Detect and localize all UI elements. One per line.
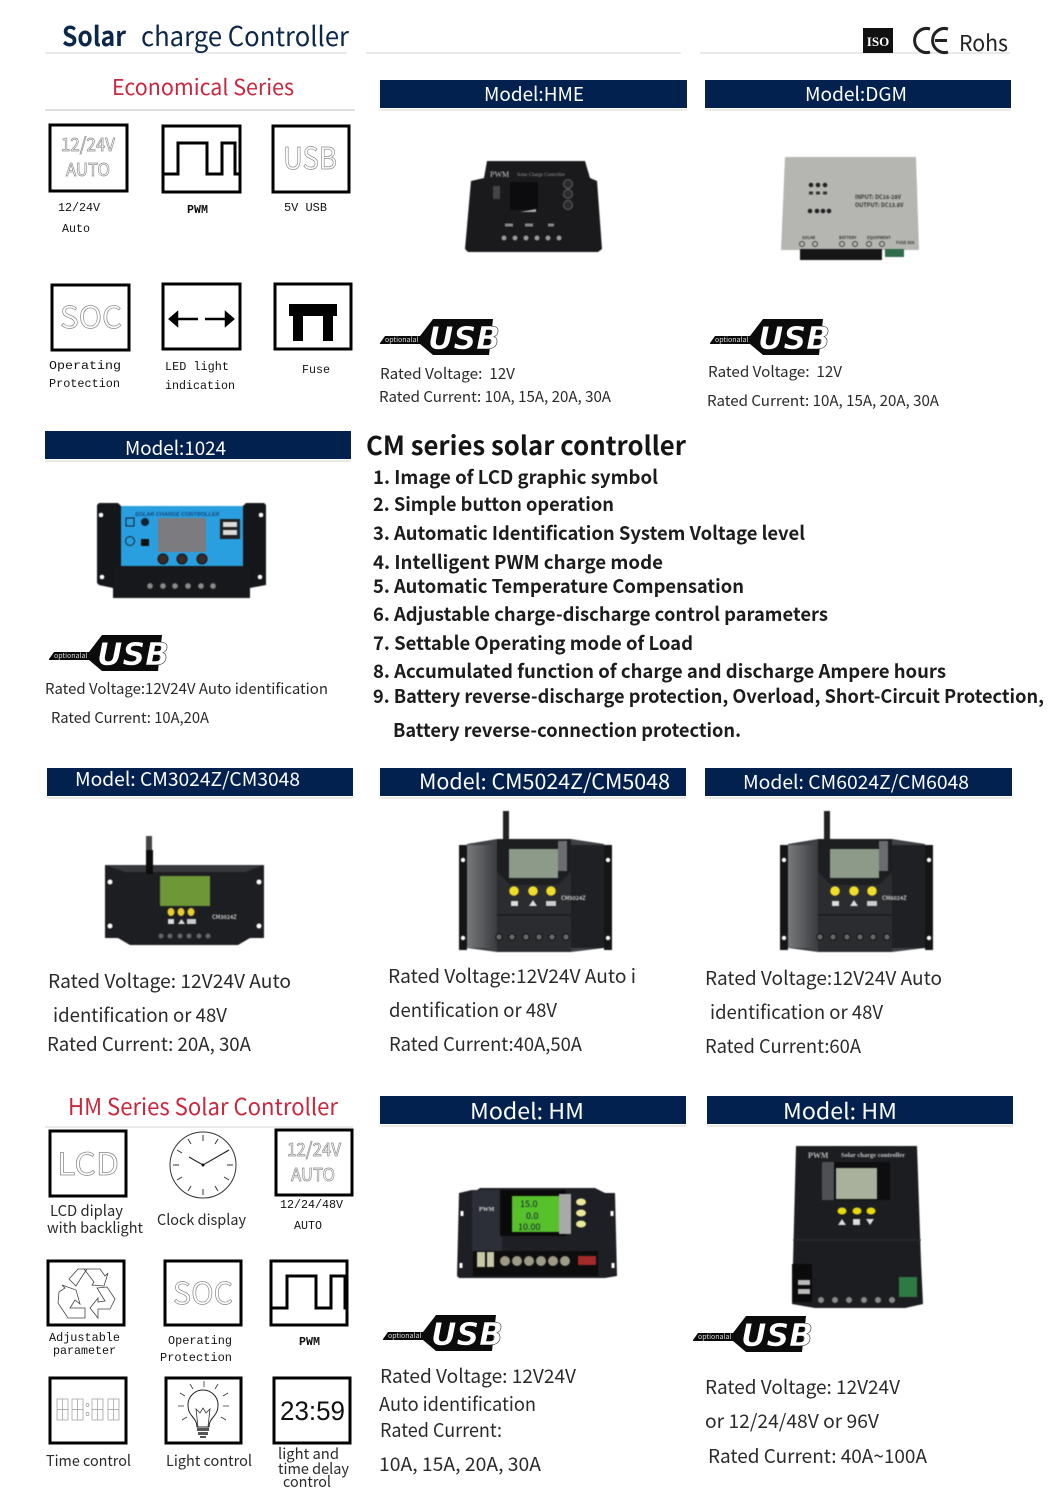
badge: optional USB: TM [807, 348, 817, 358]
header bar: Model DGM [705, 80, 1011, 108]
product photo: HM controller: 15.0 [520, 1197, 538, 1210]
header bar: CM6024Z: Model: CM6024Z/CM6048 [743, 768, 969, 795]
icon: 12/24/48V auto [276, 1130, 352, 1233]
icon: 23:59 time delay: light and [278, 1443, 339, 1464]
certification marks: Rohs [959, 26, 1008, 58]
panel: Model CM3024Z/CM3048 [47, 765, 353, 1057]
icon: SOC: Operating [49, 359, 121, 373]
product photo: DGM controller: EQUIPMENT [867, 235, 891, 241]
badge: optional USB: TM [146, 664, 156, 674]
specs: CM6024Z: Rated Voltage:12V24V Auto [705, 964, 942, 991]
icon: adjustable parameter: Adjustable [49, 1331, 120, 1345]
icon: USB: 5V USB [284, 201, 327, 215]
specs: HME: Rated Current: 10A, 15A, 20A, 30A [379, 386, 612, 407]
panel: CM series feature list [366, 426, 1044, 743]
icon: 23:59 time delay: time delay [278, 1458, 349, 1479]
icon: 12/24V auto [50, 125, 127, 236]
product photo: DGM controller: FUSE 30A [896, 240, 915, 246]
icon: 23:59 time delay [274, 1378, 350, 1492]
specs: HM left: Rated Voltage: 12V24V [380, 1362, 576, 1389]
specs: DGM [707, 361, 940, 411]
product photo: HM large controller [792, 1146, 923, 1308]
feature list: 2. Simple button operation [373, 490, 614, 517]
specs: HM left [379, 1362, 576, 1477]
product photo: HME controller: Solar Charge Controller [517, 173, 565, 178]
header bar: Model 1024: Model:1024 [125, 434, 226, 461]
icon: 12/24V auto: AUTO [66, 156, 110, 182]
badge: optional USB: optionalal [715, 335, 748, 345]
heading: Economical Series: Economical Series [112, 70, 294, 102]
feature list: 4. Intelligent PWM charge mode [373, 548, 663, 575]
icon: time control: Time control [46, 1450, 131, 1471]
icon: PWM [271, 1261, 347, 1349]
specs: CM5024Z: Rated Voltage:12V24V Auto i [388, 962, 636, 989]
specs: 1024 [45, 678, 328, 728]
header bar: Model 1024 [45, 431, 351, 461]
product photo: HM large controller: PWM [808, 1151, 829, 1160]
panel: Model HM (right) [693, 1094, 1013, 1469]
specs: 1024: Rated Current: 10A,20A [51, 707, 210, 728]
icon: PWM: PWM [299, 1335, 320, 1349]
product photo: CM6024Z: CM6024Z [882, 894, 907, 902]
specs: HM right: or 12/24/48V or 96V [705, 1407, 879, 1434]
header bar: CM3024Z [47, 765, 353, 796]
panel: Model 1024 [45, 431, 351, 728]
feature list: 7. Settable Operating mode of Load [373, 629, 693, 656]
product photo: HM controller: PWM [479, 1207, 495, 1213]
specs: HM right: Rated Current: 40A~100A [708, 1442, 927, 1469]
panel: economical series feature icons [49, 125, 351, 393]
specs: HM right: Rated Voltage: 12V24V [705, 1373, 900, 1400]
product photo: DGM controller: BATTERY [839, 235, 857, 241]
specs: CM3024Z [47, 967, 291, 1057]
icon: LCD: with backlight [47, 1217, 143, 1238]
product photo: CM3024Z [105, 836, 264, 945]
icon: adjustable parameter [48, 1261, 124, 1358]
badge: optional USB: TM [477, 348, 487, 358]
icon: SOC: Protection [49, 377, 120, 391]
specs: HM right [705, 1373, 927, 1469]
product photo: DGM controller: SOLAR [802, 235, 815, 241]
header bar: Model HME [380, 80, 687, 108]
icon: SOC: Operating [168, 1334, 232, 1348]
title [62, 15, 349, 54]
header bar: CM5024Z: Model: CM5024Z/CM5048 [419, 766, 670, 796]
product photo: CM5024Z [459, 811, 612, 952]
badge: optional USB: optionalal [385, 335, 418, 345]
badge: optional USB: optionalal [388, 1331, 421, 1341]
product photo: CM6024Z [780, 811, 933, 952]
icon: adjustable parameter: parameter [53, 1344, 116, 1358]
product photo: HM controller: 10.00 [518, 1220, 540, 1233]
icon: LED light indication: LED light [165, 360, 229, 374]
specs: HM left: Auto identification [379, 1390, 536, 1417]
badge: optional USB: USB [428, 321, 500, 357]
icon: PWM [163, 126, 240, 217]
badge: optional USB: USB [97, 637, 169, 673]
specs: CM3024Z: identification or 48V [53, 1001, 227, 1028]
specs: CM3024Z: Rated Voltage: 12V24V Auto [48, 967, 291, 994]
icon: LCD: LCD [57, 1139, 119, 1184]
icon: fuse [275, 284, 351, 377]
panel: Model CM6024Z/CM6048 [705, 768, 1012, 1059]
badge: optional USB: optionalal [698, 1332, 731, 1342]
header bar: Model HM: Model: HM [470, 1094, 584, 1126]
panel: Model HM (left) [379, 1094, 686, 1477]
icon: clock [157, 1132, 246, 1230]
header bar: Model HM: Model: HM [783, 1094, 897, 1126]
icon: 12/24/48V auto: AUTO [294, 1219, 322, 1233]
product photo: HME controller: PWM [490, 170, 509, 179]
specs: 1024: Rated Voltage:12V24V Auto identification [45, 678, 328, 699]
header bar: CM6024Z [705, 768, 1012, 796]
icon: 23:59 time delay: control [283, 1471, 331, 1492]
badge: optional USB [383, 1315, 503, 1354]
icon: SOC: SOC [60, 293, 122, 337]
panel: HM series feature icons [46, 1130, 352, 1492]
badge: optional USB: USB [741, 1318, 813, 1354]
icon: PWM: PWM [187, 203, 208, 217]
icon: 23:59 time delay: 23:59 [280, 1396, 345, 1426]
icon: SOC [160, 1261, 241, 1365]
header bar: CM3024Z: Model: CM3024Z/CM3048 [75, 765, 300, 792]
feature list [373, 463, 1044, 743]
header bar: Model DGM: Model:DGM [805, 80, 907, 107]
specs: DGM: Rated Current: 10A, 15A, 20A, 30A [707, 390, 940, 411]
specs: CM5024Z: dentification or 48V [389, 996, 557, 1023]
icon: fuse: Fuse [302, 363, 330, 377]
product photo: CM3024Z: CM3024Z [212, 913, 237, 921]
specs: CM6024Z: Rated Current:60A [705, 1032, 861, 1059]
product photo: HM large controller: Solar charge controller [841, 1152, 905, 1159]
heading: CM series: CM series solar controller [366, 426, 687, 463]
icon: SOC: Protection [160, 1351, 232, 1365]
icon: light bulb [166, 1378, 252, 1471]
specs: DGM: Rated Voltage: 12V [708, 361, 842, 382]
specs: HM left: 10A, 15A, 20A, 30A [379, 1450, 541, 1477]
badge: optional USB: USB [758, 321, 830, 357]
badge: optional USB: USB [431, 1317, 503, 1353]
icon: 12/24V auto: 12/24V [61, 131, 116, 157]
feature list: 8. Accumulated function of charge and discharge Ampere hours [373, 657, 946, 684]
header bar: Model HME: Model:HME [484, 80, 584, 107]
header bar: Model HM [707, 1094, 1013, 1126]
product photo: DGM controller: INPUT: DC16-28V [855, 193, 902, 201]
specs: HME [379, 363, 612, 407]
icon: SOC: SOC [173, 1269, 233, 1313]
product photo: CM5024Z: CM5024Z [561, 894, 586, 902]
specs: CM5024Z: Rated Current:40A,50A [389, 1030, 582, 1057]
product photo: 1024 controller [97, 503, 266, 598]
certification marks: ISO [867, 34, 889, 49]
badge: optional USB [380, 319, 500, 358]
product photo: DGM controller: OUTPUT: DC13.8V [855, 201, 904, 209]
badge: optional USB: TM [790, 1345, 800, 1355]
icon: SOC [49, 285, 129, 391]
certification marks [863, 26, 1008, 58]
product photo: 1024 controller: SOLAR CHARGE CONTROLLER [135, 512, 219, 518]
icon: time control [46, 1378, 131, 1471]
product photo: DGM controller [781, 157, 919, 260]
feature list: Battery reverse-connection protection. [393, 716, 741, 743]
product photo: HM controller: 0.0 [526, 1209, 538, 1222]
icon: 12/24V auto: Auto [62, 222, 90, 236]
title: charge Controller [141, 15, 349, 54]
icon: USB [273, 126, 349, 215]
feature list: 5. Automatic Temperature Compensation [373, 572, 744, 599]
feature list: 1. Image of LCD graphic symbol [373, 463, 658, 490]
icon: light bulb: Light control [166, 1450, 252, 1471]
badge: optional USB: optionalal [54, 651, 87, 661]
title: Solar [62, 15, 126, 54]
icon: LED light indication [163, 284, 240, 393]
product photo: HM controller [457, 1188, 617, 1278]
badge: optional USB: TM [480, 1344, 490, 1354]
icon: 12/24/48V auto: AUTO [291, 1161, 335, 1187]
icon: 12/24/48V auto: 12/24/48V [280, 1198, 344, 1212]
specs: HM left: Rated Current: [380, 1416, 502, 1443]
specs: CM3024Z: Rated Current: 20A, 30A [47, 1030, 251, 1057]
icon: LCD [47, 1131, 143, 1238]
icon: USB: USB [283, 134, 337, 178]
icon: LCD: LCD diplay [50, 1200, 123, 1221]
panel: Model DGM [705, 80, 1011, 411]
icon: clock: Clock display [157, 1209, 246, 1230]
feature list: 6. Adjustable charge-discharge control parameters [373, 600, 828, 627]
panel: Model HME [379, 80, 687, 407]
badge: optional USB [710, 319, 830, 358]
specs: CM6024Z [705, 964, 942, 1059]
icon: LED light indication: indication [165, 379, 235, 393]
badge: optional USB [49, 635, 169, 674]
specs: CM5024Z [388, 962, 636, 1057]
badge: optional USB [693, 1316, 813, 1355]
feature list: 9. Battery reverse-discharge protection, Overload, Short-Circuit Protection, [373, 682, 1044, 709]
panel: Model CM5024Z/CM5048 [380, 766, 686, 1057]
icon: 12/24/48V auto: 12/24V [287, 1136, 342, 1162]
specs: CM6024Z: identification or 48V [710, 998, 883, 1025]
specs: HME: Rated Voltage: 12V [380, 363, 515, 384]
header bar: Model HM [380, 1094, 686, 1126]
feature list: 3. Automatic Identification System Voltage level [373, 519, 805, 546]
heading: HM series: HM Series Solar Controller [68, 1088, 338, 1122]
product photo: HME controller [465, 161, 602, 252]
icon: 12/24V auto: 12/24V [58, 201, 101, 215]
